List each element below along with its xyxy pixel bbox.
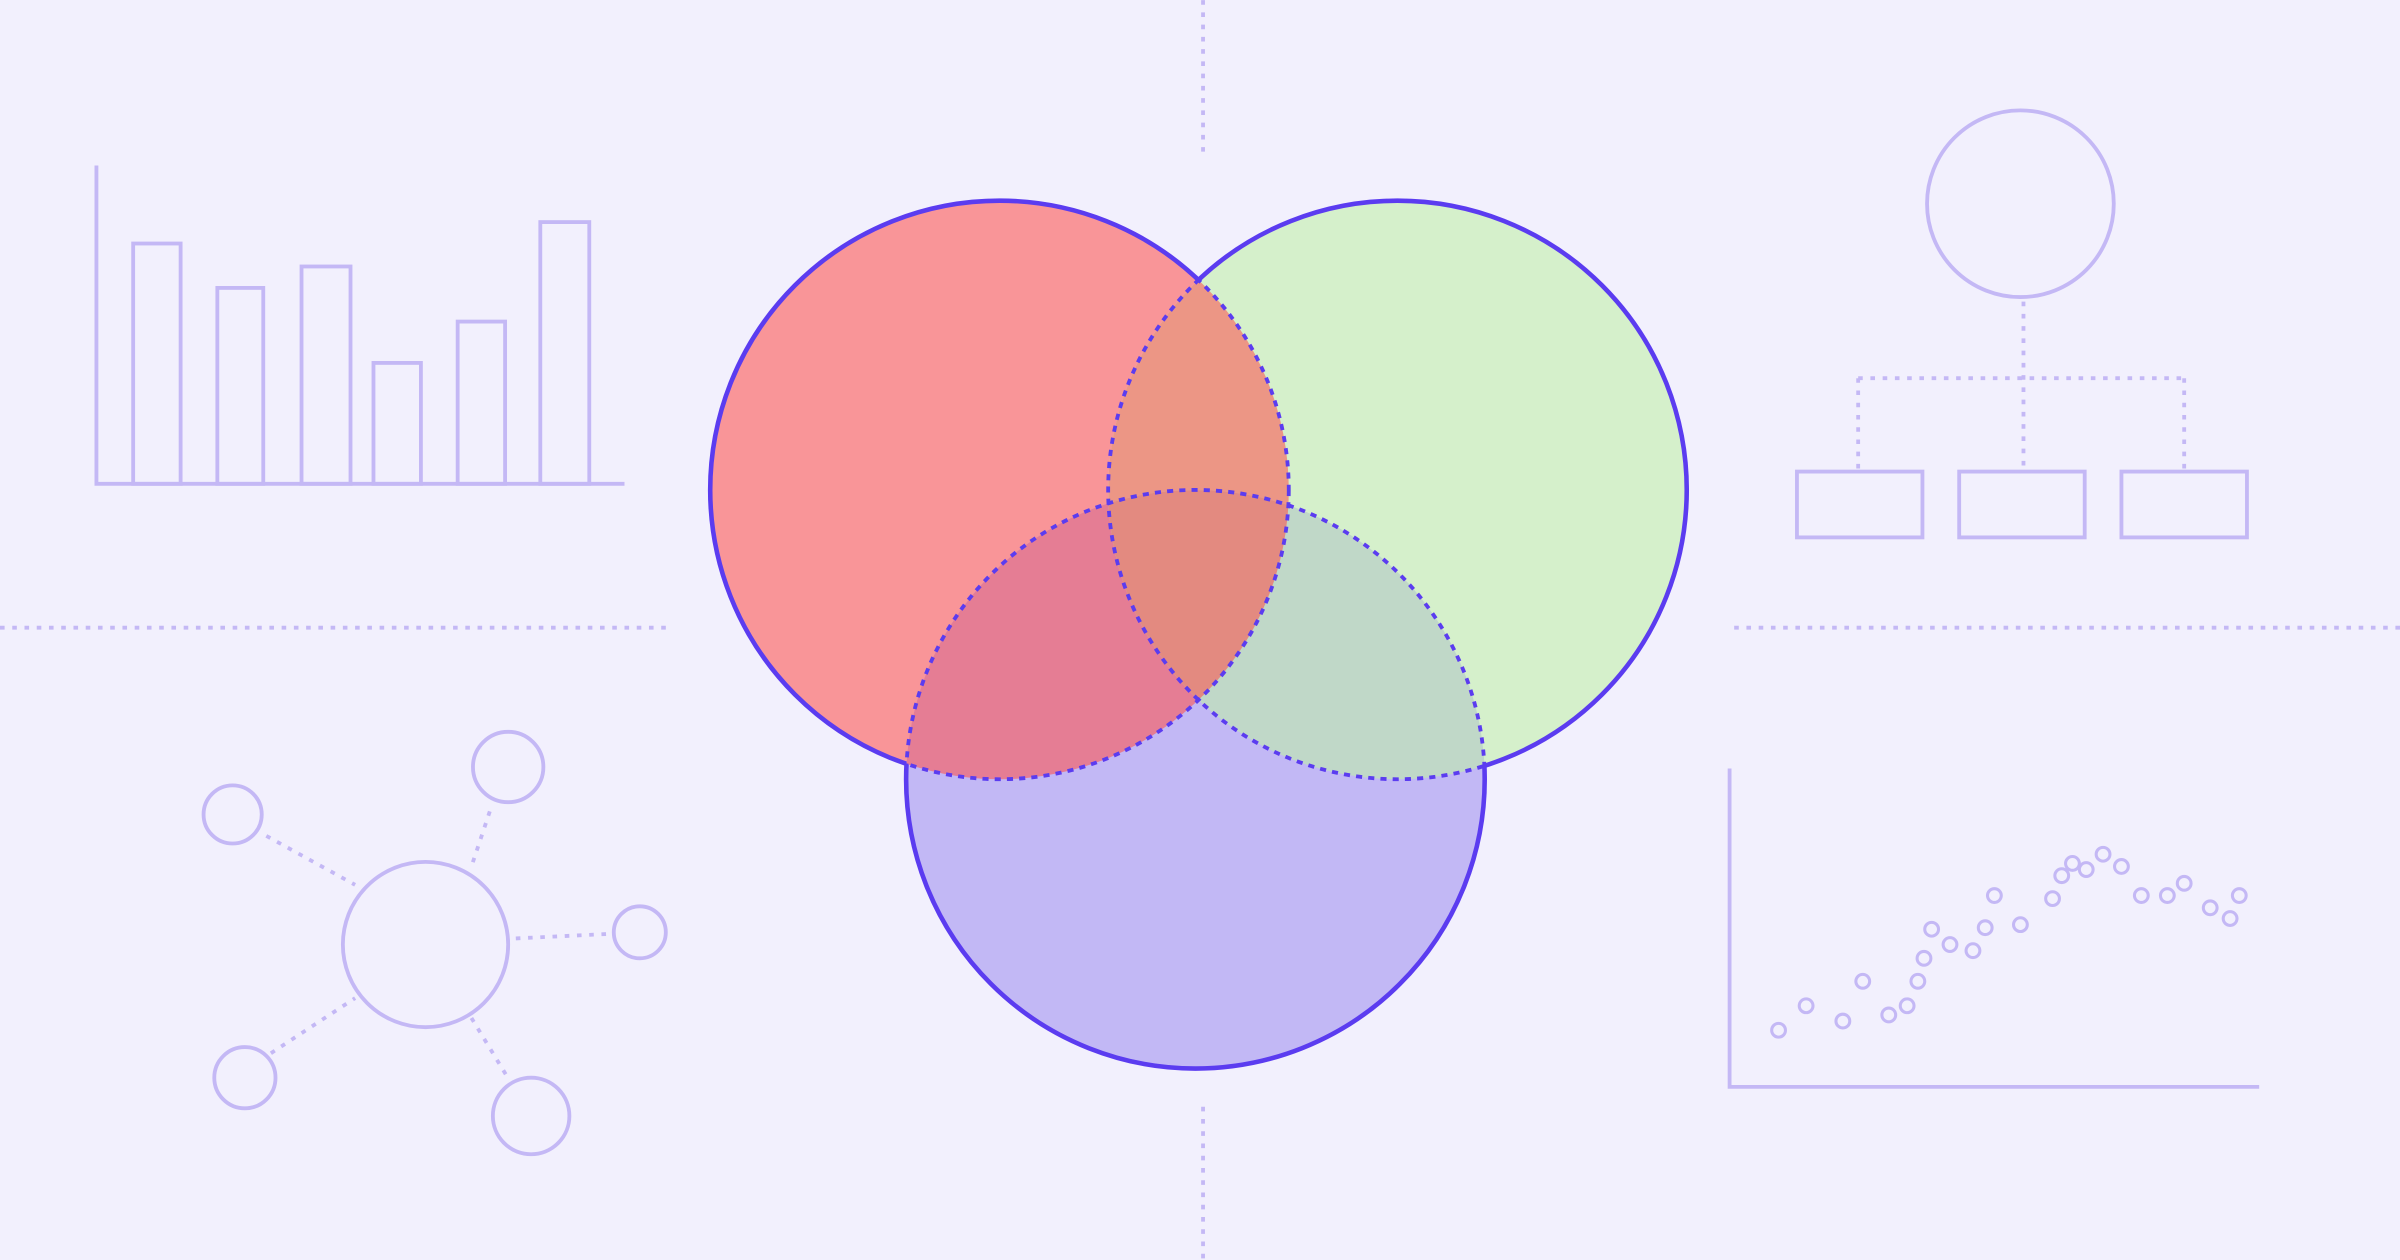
overlap: center — [1108, 490, 1288, 698]
circle: purple — [906, 490, 1485, 1069]
network diagram — [204, 732, 666, 1154]
venn diagram — [710, 201, 1687, 1069]
circle: green — [1108, 201, 1687, 779]
overlap: red-green — [1108, 282, 1289, 504]
overlap: red-purple — [906, 504, 1196, 780]
circle: red — [710, 201, 1289, 779]
scatter plot — [1730, 769, 2259, 1087]
tree diagram — [1797, 110, 2247, 537]
bar chart — [96, 165, 624, 484]
overlap: green-purple — [1108, 490, 1484, 780]
